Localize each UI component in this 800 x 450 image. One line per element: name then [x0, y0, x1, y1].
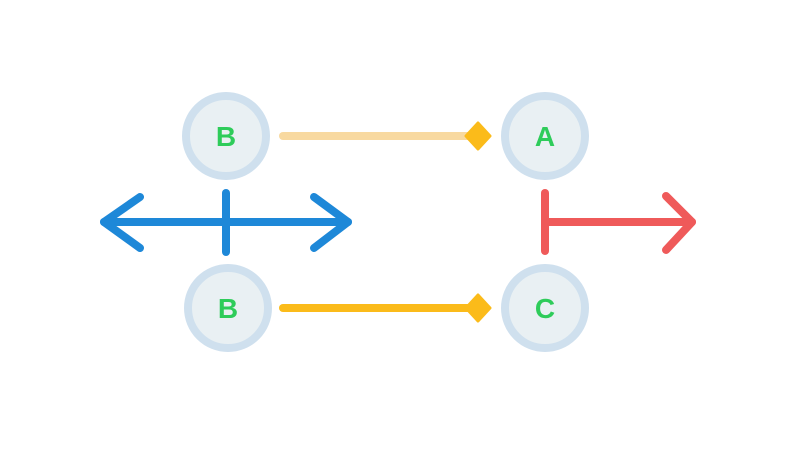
arrow: red with tick: [545, 193, 692, 251]
node: B top: [186, 96, 266, 176]
node: C: [505, 268, 585, 348]
node: B bottom: [188, 268, 268, 348]
node: B top: B: [216, 121, 236, 152]
node: A: [505, 96, 585, 176]
node: A: A: [535, 121, 555, 152]
connector: top B to A: [283, 123, 490, 149]
node: B bottom: B: [218, 293, 238, 324]
connector: bottom B to C: [283, 295, 490, 321]
arrow: blue double-headed with tick: [104, 193, 348, 252]
node: C: C: [535, 293, 555, 324]
